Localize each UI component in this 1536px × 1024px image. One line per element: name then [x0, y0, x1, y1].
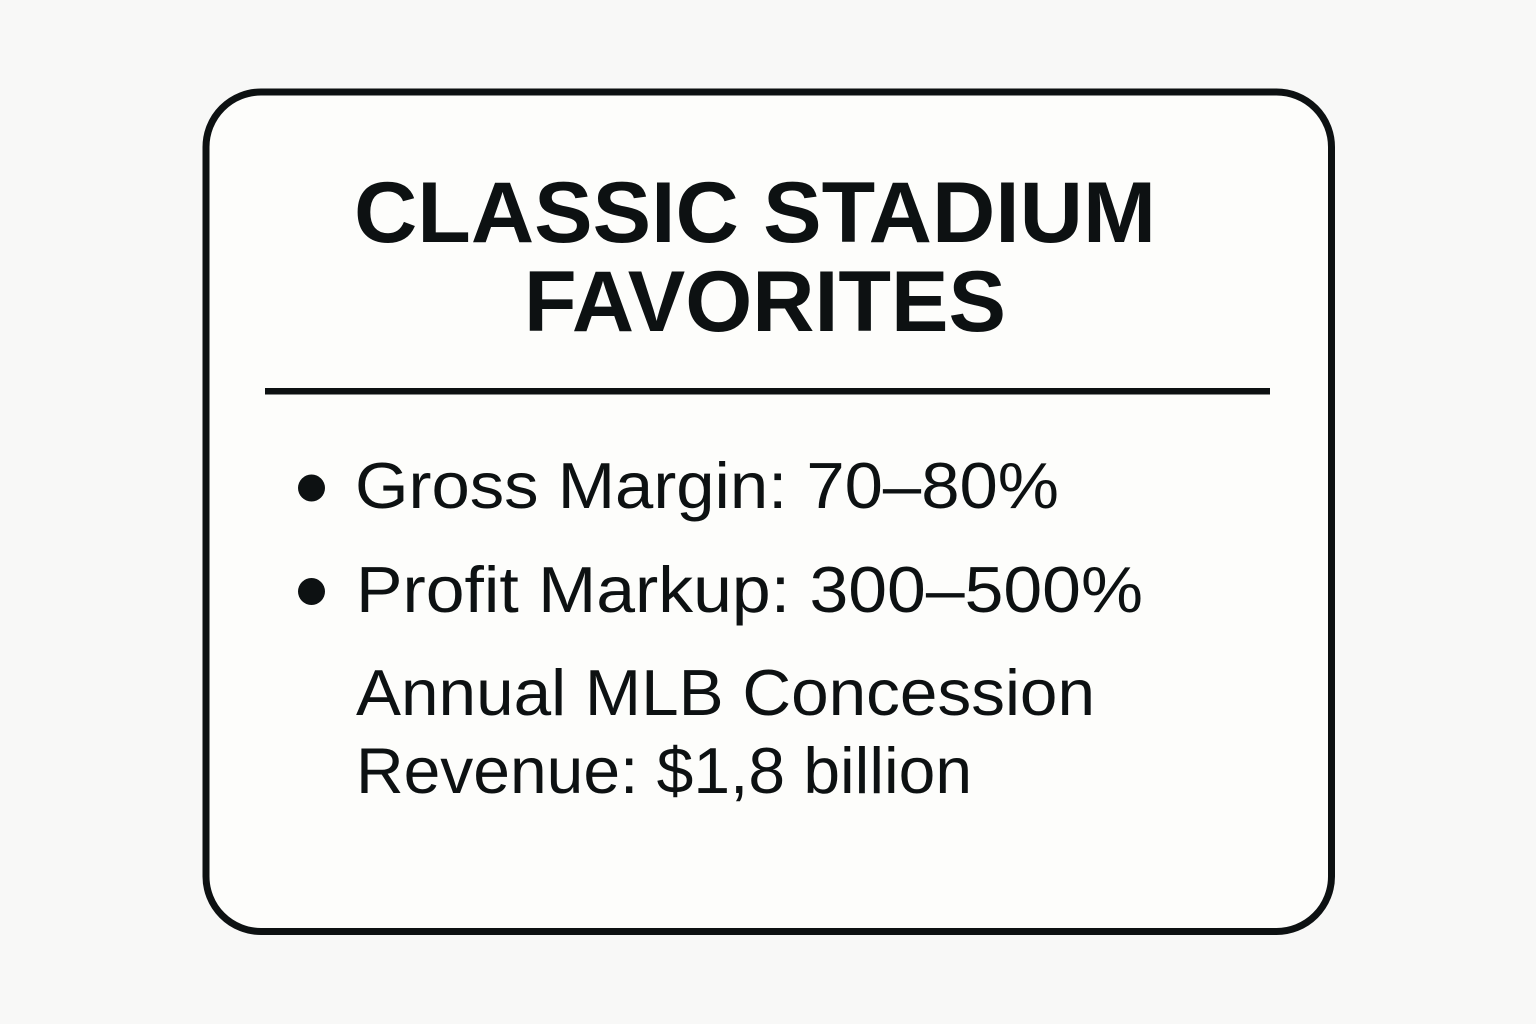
divider	[265, 388, 1270, 394]
text: annual revenue: Revenue: $1,8 billion	[356, 734, 972, 807]
title	[354, 165, 1156, 350]
title: FAVORITES	[524, 254, 1006, 350]
bullet: profit markup: Profit Markup: 300–500%	[356, 553, 1143, 626]
title: CLASSIC STADIUM	[354, 165, 1156, 261]
text: annual revenue: Annual MLB Concession	[356, 656, 1095, 729]
bullet: gross margin: Gross Margin: 70–80%	[355, 449, 1059, 522]
panel: card	[206, 92, 1332, 932]
text: annual revenue	[356, 656, 1095, 807]
